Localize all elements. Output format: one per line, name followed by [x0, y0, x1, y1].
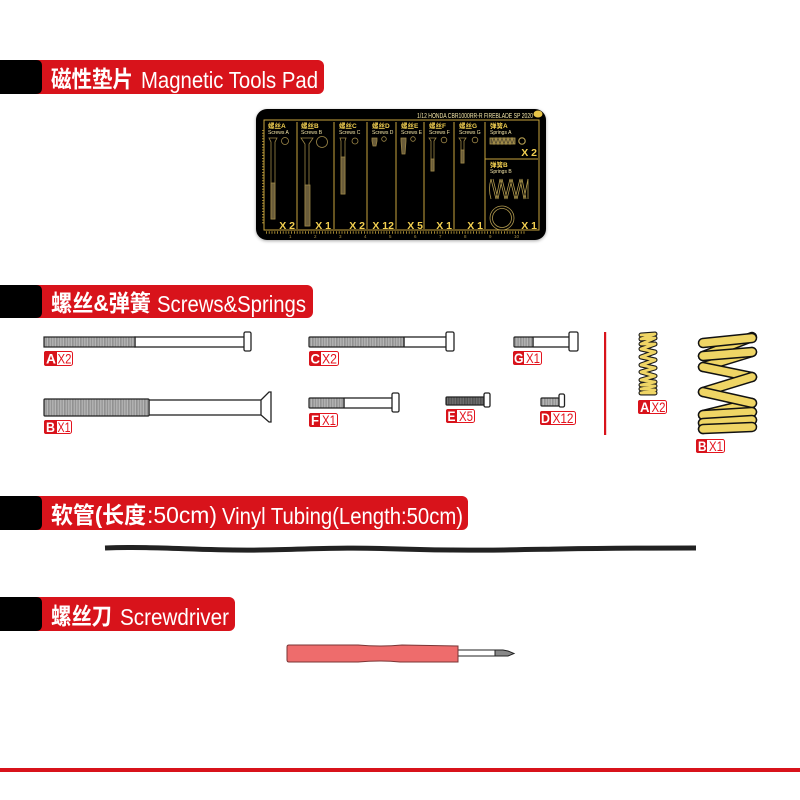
heading: Screws and Springs	[0, 285, 313, 318]
pad ruler	[263, 130, 526, 239]
label: spring A x2: X2	[652, 399, 666, 415]
pad column labels: 螺丝F	[429, 121, 446, 130]
pad column labels: 螺丝C	[339, 121, 357, 130]
label: spring B x1: B	[698, 438, 706, 454]
label: spring A x2	[638, 399, 666, 415]
pad column labels: Screws G	[459, 130, 481, 136]
label: A x2	[44, 350, 72, 366]
label: G x1	[513, 350, 542, 366]
panel: magnetic tools pad	[256, 109, 546, 240]
spring B	[703, 337, 752, 429]
label: A x2: X2	[58, 350, 72, 366]
pad spring outlines	[490, 138, 528, 230]
label: spring B x1: X1	[709, 438, 723, 454]
pad ruler: 1	[289, 234, 292, 239]
screw D	[541, 394, 564, 407]
screw A	[44, 332, 251, 351]
pad column labels: 螺丝E	[401, 121, 419, 130]
pad column labels: Screws B	[301, 130, 323, 136]
label: F x1	[309, 412, 338, 428]
pad column labels: Screws F	[429, 130, 450, 136]
screw E	[446, 393, 490, 407]
heading: Magnetic Tools Pad: Magnetic Tools Pad	[141, 67, 318, 93]
heading: Screwdriver: 螺丝刀	[51, 603, 112, 629]
pad column labels: 弹簧A	[490, 121, 508, 130]
heading: Screwdriver: Screwdriver	[120, 604, 229, 630]
label: E x5: X5	[459, 408, 473, 424]
label: D x12	[540, 410, 576, 426]
pad column labels: 螺丝D	[372, 121, 390, 130]
pad column labels: 螺丝B	[301, 121, 319, 130]
heading: Screws and Springs: 螺丝&弹簧	[51, 290, 151, 316]
label: C x2	[309, 350, 338, 366]
heading: Screws and Springs: Screws&Springs	[157, 291, 306, 317]
pad column labels: 螺丝A	[268, 121, 286, 130]
label: A x2: A	[46, 350, 56, 366]
pad ruler: 7	[439, 234, 442, 239]
label: spring B x1	[696, 438, 724, 454]
heading: Vinyl Tubing: Vinyl Tubing(Length:50cm)	[222, 503, 463, 529]
pad column labels: Springs A	[490, 130, 512, 136]
vinyl tube	[105, 548, 696, 550]
label: G x1: X1	[526, 350, 540, 366]
pad quantities: X 1	[436, 220, 452, 232]
pad quantities: X 12	[372, 220, 394, 232]
pad column labels: 螺丝G	[459, 121, 477, 130]
heading: Magnetic Tools Pad	[0, 60, 324, 94]
label: F x1: X1	[322, 412, 336, 428]
spring A	[641, 334, 655, 393]
pad ruler: 9	[489, 234, 492, 239]
pad quantities: X 1	[521, 220, 537, 232]
pad quantities: X 2	[349, 220, 365, 232]
pad title: 1/12 HONDA CBR1000RR-R FIREBLADE SP 2020	[417, 111, 533, 120]
screw F	[309, 393, 399, 412]
pad ruler: 8	[464, 234, 467, 239]
label: B x1	[44, 419, 72, 435]
label: spring A x2: A	[640, 399, 650, 415]
pad logo dot	[534, 110, 542, 118]
pad quantities	[279, 147, 537, 232]
pad column labels	[268, 121, 512, 175]
pad ruler: 3	[339, 234, 342, 239]
label: E x5	[446, 408, 474, 424]
label: C x2: C	[310, 350, 320, 366]
pad column labels: Springs B	[490, 169, 512, 175]
pad quantities: X 2	[279, 220, 295, 232]
screw B	[44, 392, 271, 422]
label: G x1: G	[514, 350, 524, 366]
label: B x1: B	[46, 419, 55, 435]
label: B x1: X1	[58, 419, 71, 435]
pad ruler: 4	[364, 234, 367, 239]
heading: Magnetic Tools Pad: 磁性垫片	[51, 66, 133, 92]
pad quantities: X 1	[315, 220, 331, 232]
footer bar	[0, 768, 800, 772]
label: C x2: X2	[322, 350, 337, 366]
screw G	[514, 332, 578, 351]
pad quantities: X 5	[407, 220, 423, 232]
pad column labels: Screws A	[268, 130, 290, 136]
label: F x1: F	[311, 412, 319, 428]
pad frame and dividers	[264, 120, 539, 230]
heading: Screwdriver	[0, 597, 235, 631]
divider: screws and springs	[604, 332, 606, 435]
pad column labels: Screws C	[339, 130, 361, 136]
pad ruler: 10	[514, 234, 520, 239]
pad column labels: Screws E	[401, 130, 423, 136]
pad ruler: 6	[414, 234, 417, 239]
pad quantities: X 1	[467, 220, 483, 232]
label: E x5: E	[448, 408, 456, 424]
heading: Vinyl Tubing	[0, 496, 468, 530]
heading: Vinyl Tubing: :50cm)	[147, 502, 217, 528]
label: D x12: D	[541, 410, 550, 426]
heading: Vinyl Tubing: 软管(长度	[51, 502, 146, 528]
label: D x12: X12	[552, 410, 574, 426]
screw C	[309, 332, 454, 351]
screwdriver	[287, 645, 514, 662]
pad ruler: 2	[314, 234, 317, 239]
pad screw outlines	[269, 136, 478, 226]
pad column labels: Screws D	[372, 130, 394, 136]
pad ruler: 5	[389, 234, 392, 239]
pad quantities: X 2	[521, 147, 537, 159]
pad column labels: 弹簧B	[490, 160, 508, 169]
